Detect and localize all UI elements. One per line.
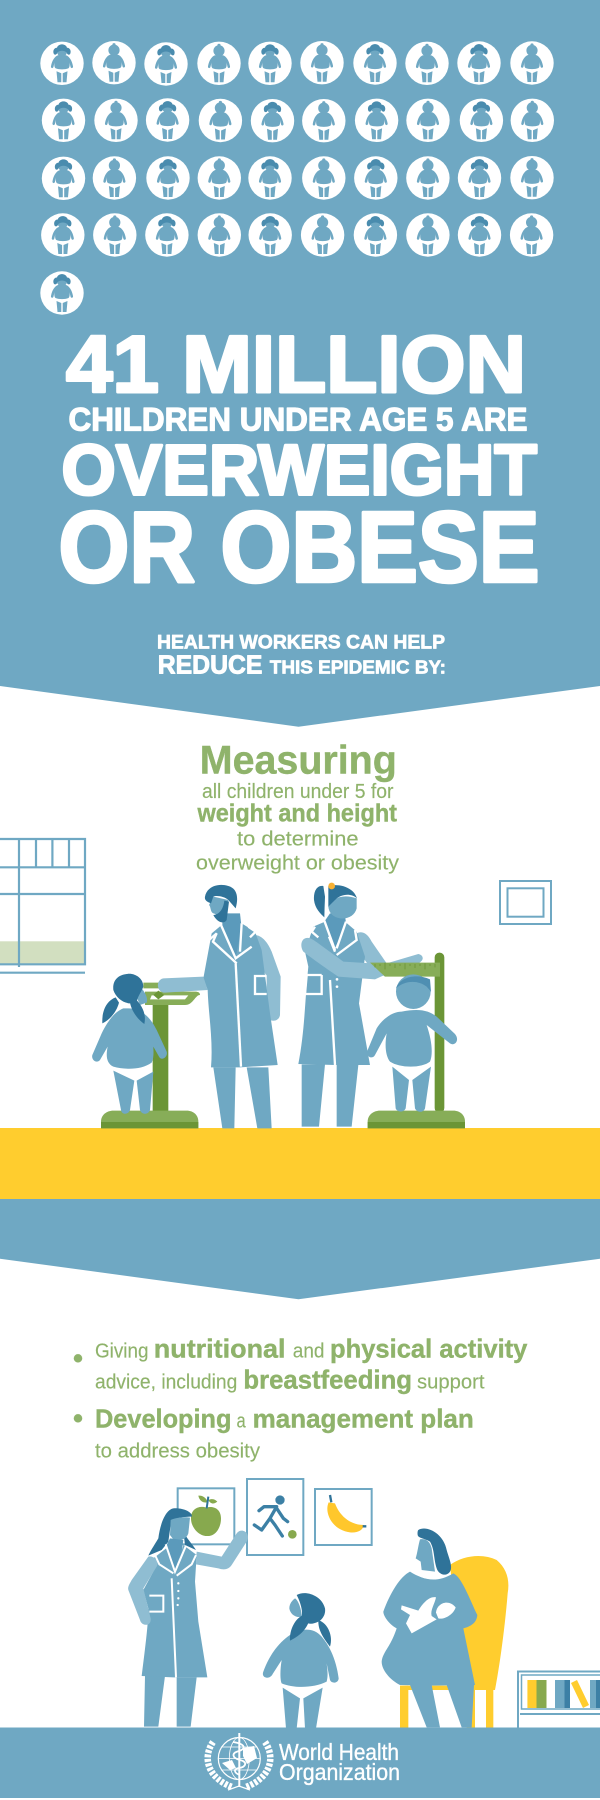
panel: middle chevron banner xyxy=(0,1199,600,1299)
icon: boy xyxy=(198,156,241,200)
words: physical activity: physical activity xyxy=(330,1334,528,1364)
icon: boy xyxy=(93,156,136,200)
icon: girl xyxy=(248,156,292,200)
headline xyxy=(58,320,540,604)
heading: measuring: Measuring xyxy=(200,738,397,782)
headline line: overweight: OVERWEIGHT xyxy=(62,432,537,510)
icon: girl xyxy=(248,42,292,85)
icon: boy xyxy=(197,42,241,85)
bullet marker 2 xyxy=(74,1414,82,1423)
icon: girl xyxy=(144,42,188,86)
logo text xyxy=(279,1739,400,1785)
bullet 1 line 2 xyxy=(95,1364,485,1394)
icon: boy xyxy=(406,99,450,142)
headline line: or obese: OR OBESE xyxy=(58,492,540,604)
text line: to determine: to determine xyxy=(237,828,359,851)
icon: boy xyxy=(302,156,346,200)
icon: boy xyxy=(510,41,554,85)
icon: girl xyxy=(355,99,398,142)
words: advice, including: advice, including xyxy=(95,1371,237,1393)
icon: girl xyxy=(353,41,397,85)
bookshelf xyxy=(518,1672,600,1732)
icon: boy xyxy=(199,99,242,142)
illustration: wall frame xyxy=(500,881,551,924)
icon: boy xyxy=(406,213,450,257)
icon: boy xyxy=(94,99,138,142)
bullet 1 line 1 xyxy=(95,1334,528,1364)
text block: measuring xyxy=(196,738,400,874)
icon: boy xyxy=(511,99,554,142)
text line: overweight or obesity: overweight or obesity xyxy=(196,851,400,874)
icon: girl xyxy=(41,213,84,257)
subheading words: this epidemic by: THIS EPIDEMIC BY: xyxy=(270,656,446,677)
icon: girl xyxy=(354,156,398,200)
text line: weight and height: weight and height xyxy=(197,799,398,827)
icon: boy xyxy=(93,213,136,257)
icon: boy xyxy=(510,156,554,199)
icon: girl xyxy=(457,41,501,85)
bullet list xyxy=(74,1334,528,1463)
child: girl from behind xyxy=(92,974,167,1114)
doctor: bearded man xyxy=(158,885,281,1128)
weight scale xyxy=(101,983,200,1128)
icon: girl xyxy=(249,213,292,257)
footer band xyxy=(0,1728,600,1798)
icon: girl xyxy=(145,213,189,257)
logo text line 1: World Health xyxy=(279,1739,399,1765)
icon: girl xyxy=(458,213,501,257)
bullet 2 line 2: to address obesity xyxy=(95,1440,261,1463)
icon: girl xyxy=(42,157,85,200)
icon: boy xyxy=(300,41,344,84)
baby xyxy=(401,1597,456,1633)
icon: girl xyxy=(40,271,84,315)
logo: World Health Organization emblem xyxy=(208,1733,270,1790)
word: a: a xyxy=(236,1410,246,1432)
word: and: and xyxy=(293,1341,324,1363)
word: nutritional: nutritional xyxy=(154,1334,286,1364)
chair xyxy=(400,1556,508,1728)
poster: running child with ball xyxy=(247,1479,303,1555)
scene: measuring height xyxy=(298,883,465,1128)
headline line: children under age 5 are: CHILDREN UNDER AGE 5 ARE xyxy=(68,401,528,437)
mother with baby on yellow chair xyxy=(382,1529,508,1728)
bullet 2 line 1 xyxy=(95,1403,474,1433)
icon: girl xyxy=(40,42,84,85)
measuring rod xyxy=(370,963,440,977)
icon: boy xyxy=(301,213,344,257)
icon: boy xyxy=(510,213,553,257)
icon: boy xyxy=(92,41,136,84)
icon: boy xyxy=(302,99,346,142)
poster: apple xyxy=(178,1488,234,1544)
icon: girl xyxy=(460,99,503,142)
child: boy from behind xyxy=(367,974,457,1112)
icon: girl xyxy=(251,99,294,142)
icon: girl xyxy=(458,156,501,200)
icon: girl xyxy=(42,99,85,142)
scene: measuring weight xyxy=(92,885,281,1128)
icon: boy xyxy=(198,213,241,257)
subheading line 1: HEALTH WORKERS CAN HELP xyxy=(157,631,445,653)
doctor: woman with long hair pointing at posters xyxy=(128,1508,248,1727)
child: girl looking at posters xyxy=(263,1593,339,1728)
icon: boy xyxy=(405,42,449,85)
subheading: health workers xyxy=(157,631,446,679)
illustration: window xyxy=(0,839,85,973)
word: developing: Developing xyxy=(95,1403,232,1433)
word: giving: Giving xyxy=(95,1341,148,1363)
icon: girl xyxy=(146,156,190,200)
bullet marker 1 xyxy=(74,1354,82,1363)
mother xyxy=(382,1529,477,1727)
word: support: support xyxy=(417,1371,485,1393)
word: breastfeeding: breastfeeding xyxy=(243,1364,412,1394)
logo text line 2: Organization xyxy=(279,1759,400,1785)
subheading word: reduce: REDUCE xyxy=(158,649,262,679)
icon grid: 41 overweight children xyxy=(40,41,554,315)
doctor: woman with ponytail xyxy=(298,883,423,1127)
poster: banana xyxy=(315,1489,372,1545)
icon: girl xyxy=(354,213,397,257)
icon: boy xyxy=(406,156,450,200)
floor band xyxy=(0,1128,600,1199)
panel: top banner xyxy=(0,0,600,727)
headline line: 41 million: 41 MILLION xyxy=(66,320,526,410)
height scale xyxy=(368,953,465,1128)
text line: all children: all children under 5 for xyxy=(202,780,394,803)
icon: girl xyxy=(146,98,189,142)
words: management plan: management plan xyxy=(253,1403,474,1433)
